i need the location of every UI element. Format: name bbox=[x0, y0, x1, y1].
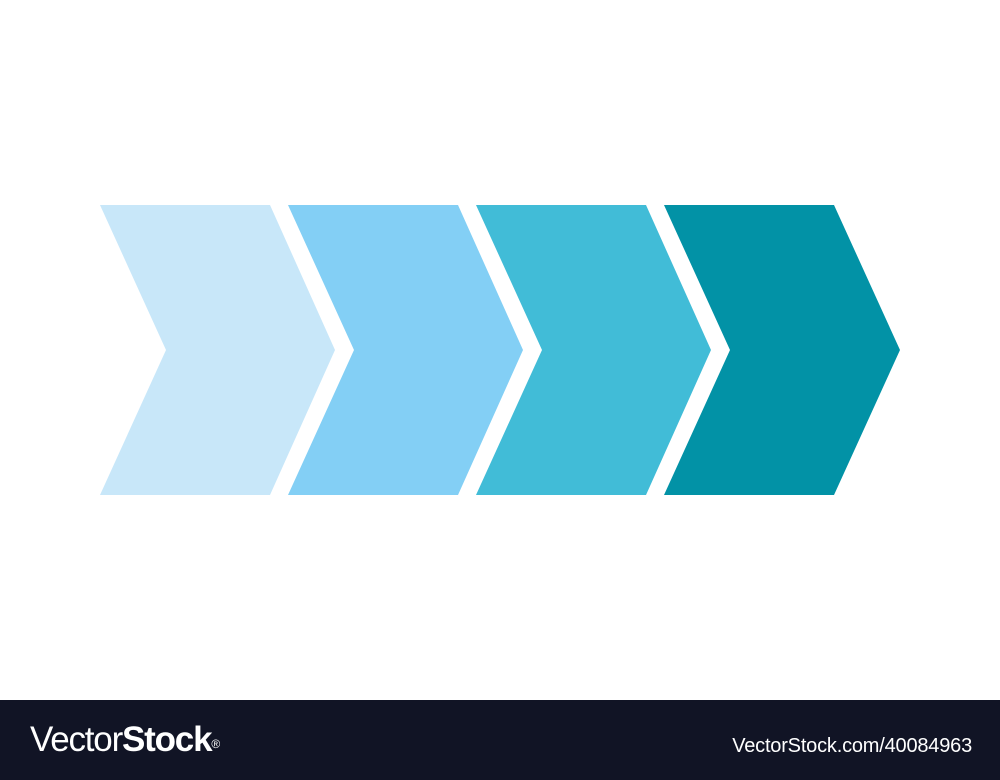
chevron 1 bbox=[100, 205, 335, 495]
chevron 3 bbox=[476, 205, 711, 495]
chevron 4 bbox=[664, 205, 900, 495]
footer url: VectorStock.com/40084963 bbox=[732, 735, 972, 757]
footer logo: VectorStock® bbox=[30, 720, 220, 759]
chevron 2 bbox=[288, 205, 523, 495]
footer bar bbox=[0, 700, 1000, 780]
